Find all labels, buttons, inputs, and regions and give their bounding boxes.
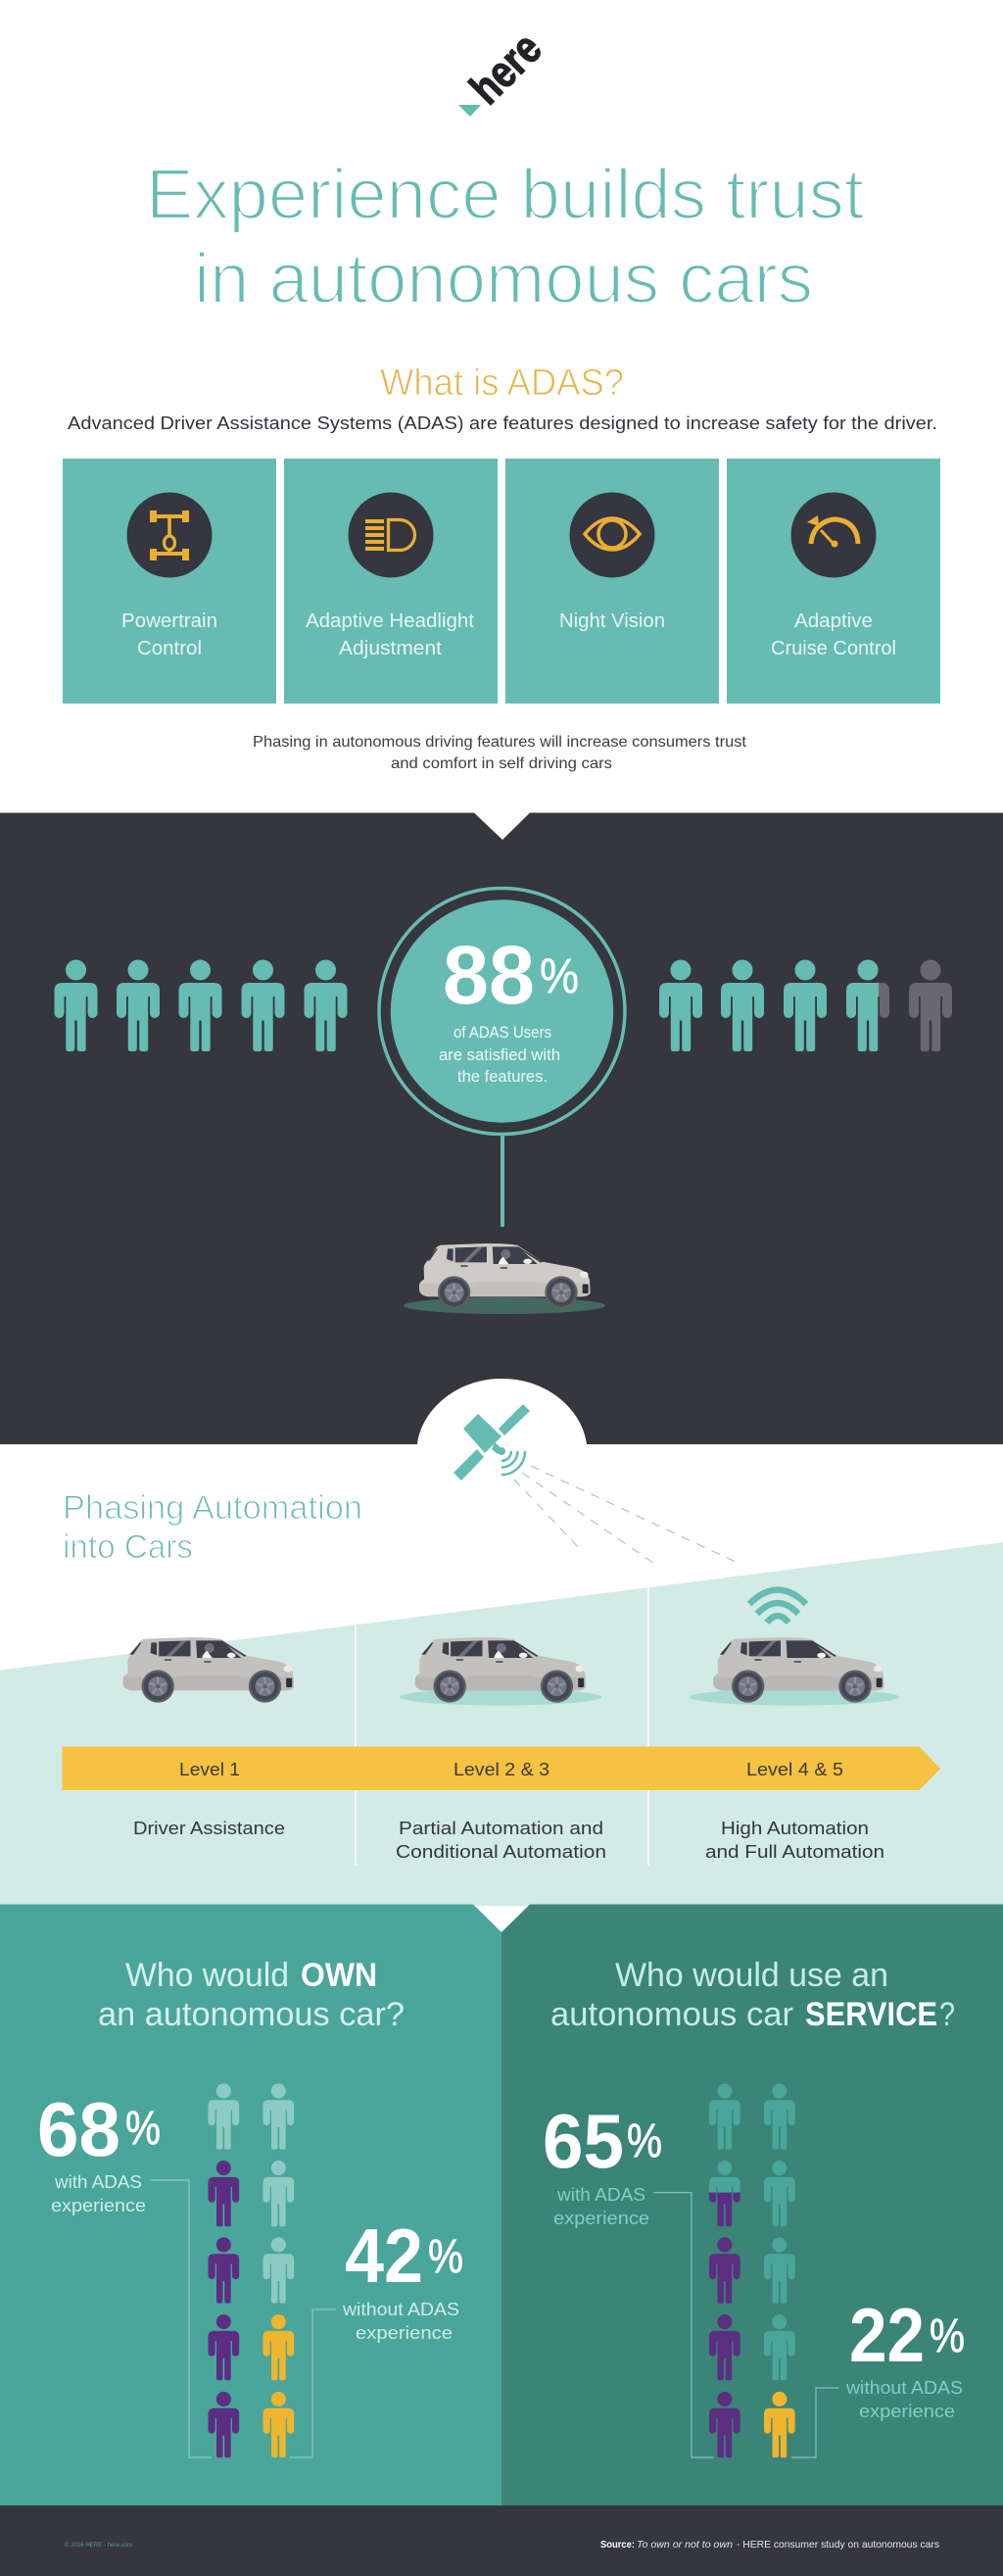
- source: [600, 2539, 939, 2551]
- source: To own or not to own: [637, 2539, 733, 2551]
- text: phasing in features: Phasing in autonomous driving features will increase consumers trust: [253, 734, 747, 751]
- icon: powertrain: [150, 510, 189, 560]
- stat: 65 percent: with ADAS: [556, 2185, 645, 2205]
- stat: 42 percent: %: [428, 2231, 463, 2283]
- column dividers: [356, 1587, 648, 1866]
- panel: dark satisfaction section: [0, 813, 1003, 1444]
- text: phasing in features: and comfort in self driving cars: [391, 755, 612, 772]
- connector line: [501, 1135, 504, 1227]
- footer: [0, 2505, 1003, 2576]
- callout: 88 percent: [379, 888, 625, 1135]
- stat: 65 percent: %: [627, 2115, 662, 2167]
- source: Source:: [600, 2539, 635, 2551]
- stat: 68 percent: experience: [51, 2196, 146, 2215]
- level descriptions: [133, 1819, 884, 1862]
- heading: OWN: [301, 1957, 377, 1994]
- stat: 42 percent: 42: [345, 2212, 423, 2299]
- logo: HERE: here: [459, 23, 551, 114]
- callout: 88 percent: 88: [443, 929, 535, 1021]
- panel: Adaptive Headlight Adjustment: [284, 459, 498, 704]
- panel: Powertrain Control: [63, 459, 276, 704]
- connector: [653, 2193, 714, 2457]
- level descriptions: and Full Automation: [705, 1842, 884, 1862]
- level descriptions: Conditional Automation: [396, 1842, 606, 1862]
- arrow: levels: [63, 1746, 940, 1790]
- callout: 88 percent: the features.: [457, 1067, 548, 1086]
- arrow: levels: Level 1: [179, 1760, 240, 1779]
- stat: 65 percent: [543, 2098, 662, 2228]
- connector: [150, 2180, 212, 2457]
- heading: Phasing Automation into Cars: Phasing Automation: [63, 1489, 362, 1527]
- panel: who would use service: [502, 1905, 1003, 2505]
- callout: 88 percent: %: [540, 948, 579, 1003]
- icon: gauge: [807, 515, 858, 547]
- heading: Phasing Automation into Cars: [63, 1489, 362, 1566]
- car: level 2 and 3: [400, 1637, 601, 1705]
- panel: Adaptive Cruise Control: [727, 459, 940, 704]
- stat: 22 percent: experience: [859, 2402, 955, 2421]
- icon: wifi: [749, 1589, 806, 1623]
- stat: 22 percent: [845, 2292, 965, 2421]
- heading: autonomous car: [550, 1996, 793, 2033]
- label: Control: [137, 638, 202, 659]
- car: level 1: [123, 1637, 294, 1703]
- intro text: Advanced Driver Assistance Systems (ADAS) are features designed to increase safety for the driver.: [68, 413, 937, 433]
- people row: right: [659, 960, 952, 1051]
- title: in autonomous cars: [194, 240, 813, 318]
- heading: [550, 1957, 955, 2033]
- heading: Who would: [125, 1957, 289, 1994]
- panel: phasing automation background: [0, 1542, 1003, 1906]
- heading: What is ADAS?: What is ADAS?: [380, 363, 624, 404]
- stat: 68 percent: 68: [37, 2086, 120, 2172]
- callout: 88 percent: of ADAS Users: [454, 1023, 551, 1042]
- heading: Who would use an: [615, 1957, 888, 1994]
- copyright: © 2016 HERE - here.com: [65, 2541, 132, 2549]
- stat: 65 percent: 65: [543, 2098, 624, 2184]
- icon: eye: [585, 518, 640, 550]
- stat: 68 percent: with ADAS: [54, 2172, 142, 2192]
- stat: 22 percent: 22: [849, 2292, 925, 2378]
- source: - HERE consumer study on autonomous cars: [737, 2539, 939, 2551]
- label: Adjustment: [339, 638, 442, 659]
- label: [306, 610, 474, 659]
- title: Experience builds trust: [146, 156, 864, 234]
- heading: ?: [939, 1996, 955, 2033]
- label: Adaptive Headlight: [306, 610, 474, 632]
- stat: 42 percent: [342, 2212, 463, 2343]
- label: Cruise Control: [771, 638, 896, 659]
- label: [121, 610, 217, 659]
- stat: 22 percent: %: [930, 2310, 965, 2362]
- stat: 65 percent: experience: [553, 2209, 649, 2228]
- heading: SERVICE: [805, 1996, 937, 2033]
- heading: Phasing Automation into Cars: into Cars: [63, 1529, 193, 1566]
- level descriptions: Partial Automation and: [399, 1819, 603, 1838]
- people row: left: [55, 960, 347, 1051]
- arrow: levels: Level 2 & 3: [454, 1760, 549, 1779]
- stat: 68 percent: %: [125, 2103, 161, 2155]
- level descriptions: High Automation: [721, 1819, 869, 1838]
- icon: headlight: [365, 519, 415, 551]
- label: Powertrain: [121, 610, 217, 632]
- satellite signal beams: [514, 1466, 738, 1563]
- stat: 68 percent: [37, 2086, 161, 2215]
- people grid: [709, 2083, 795, 2457]
- heading: an autonomous car?: [98, 1996, 405, 2033]
- stat: 42 percent: experience: [356, 2323, 453, 2343]
- car: level 4 and 5: [690, 1637, 899, 1705]
- icon: satellite: [454, 1404, 530, 1481]
- heading: [98, 1957, 405, 2033]
- car on shadow: [404, 1243, 605, 1314]
- people grid: [208, 2083, 294, 2457]
- callout: 88 percent: are satisfied with: [439, 1045, 560, 1064]
- connector: [290, 2309, 336, 2457]
- stat: 42 percent: without ADAS: [342, 2300, 459, 2319]
- level descriptions: Driver Assistance: [133, 1819, 285, 1838]
- panel: who would own: [0, 1905, 502, 2505]
- stat: 22 percent: without ADAS: [845, 2378, 963, 2398]
- title: [146, 156, 864, 318]
- connector: [791, 2388, 838, 2457]
- panel: Night Vision: [505, 459, 719, 704]
- arrow: levels: Level 4 & 5: [746, 1760, 843, 1779]
- label: Adaptive: [794, 610, 873, 632]
- label: [771, 610, 896, 659]
- text: phasing in features: [253, 734, 747, 772]
- label: Night Vision: [559, 610, 665, 632]
